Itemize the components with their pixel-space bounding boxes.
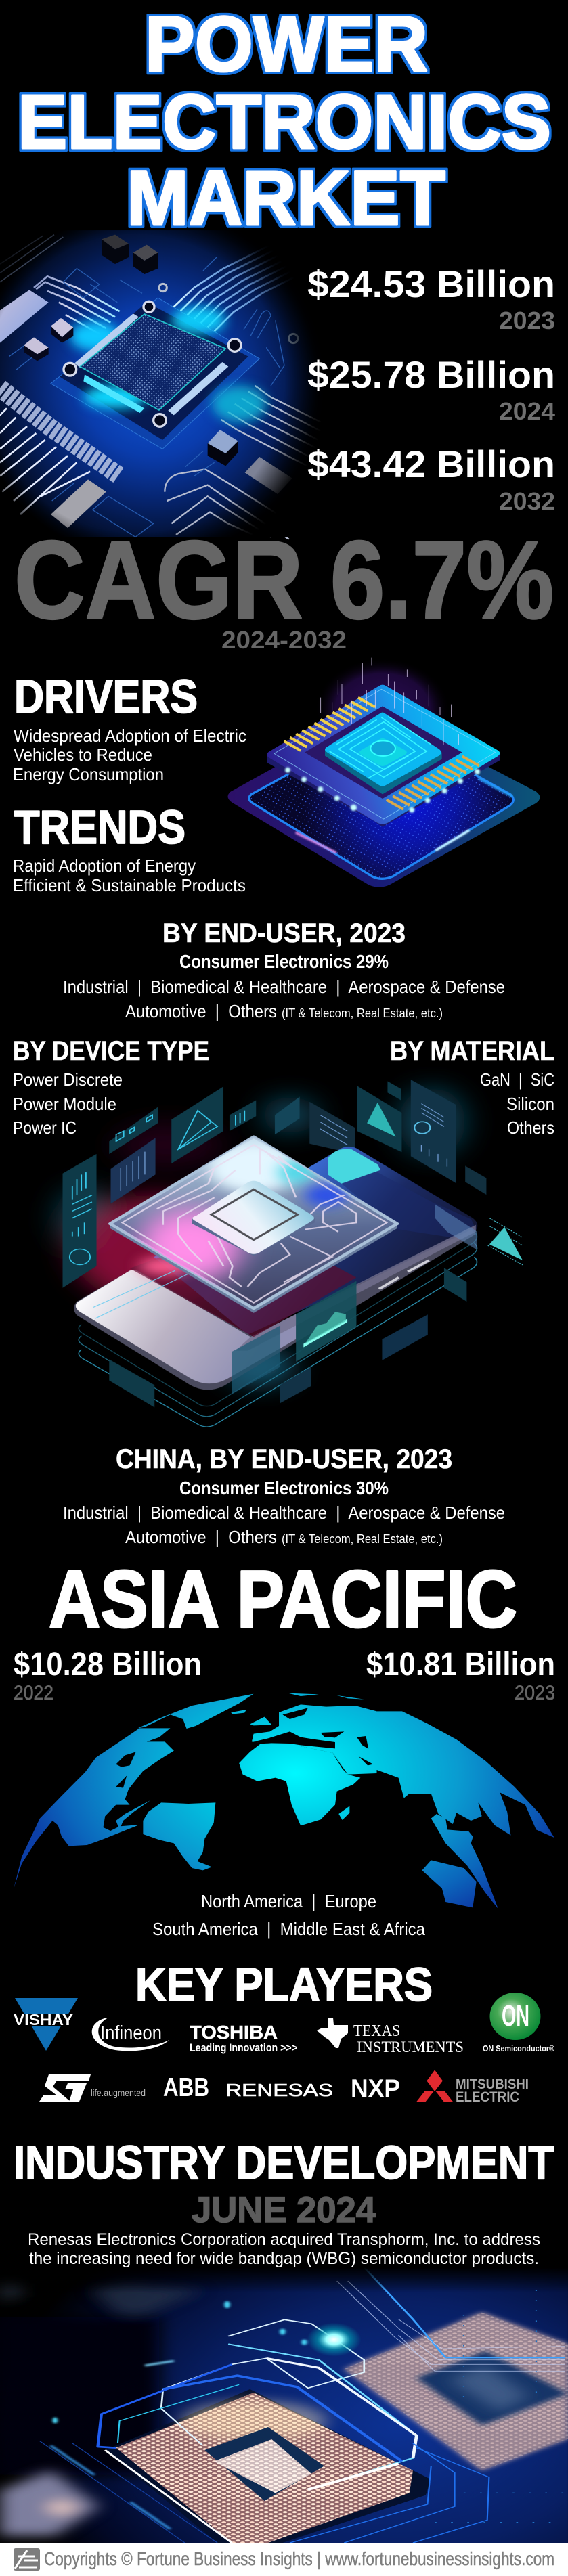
title: MARKET	[127, 155, 445, 242]
segment: China by end-user: Industrial | Biomedical & Healthcare | Aerospace & Defense	[63, 1503, 505, 1523]
other regions list: South America | Middle East & Africa	[152, 1919, 425, 1939]
Africa	[239, 1744, 360, 1825]
logo: Vishay	[12, 1998, 80, 2051]
second chip, out of focus	[344, 2313, 568, 2470]
drivers	[13, 670, 246, 784]
market values	[307, 263, 555, 515]
South America	[143, 1802, 215, 1870]
Asia Pacific values: 2022	[14, 1682, 53, 1704]
logo: Infineon	[92, 2018, 169, 2051]
logo: Mitsubishi Electric: MITSUBISHI	[456, 2077, 529, 2092]
heading: key players: KEY PLAYERS	[135, 1958, 433, 2011]
market values: $43.42 Billion	[307, 443, 555, 485]
development description	[28, 2230, 540, 2268]
segment: by material: BY MATERIAL	[390, 1036, 554, 1066]
drivers: Vehicles to Reduce	[14, 745, 152, 765]
segment: by material: Silicon	[506, 1094, 554, 1114]
trends: Efficient & Sustainable Products	[13, 875, 246, 895]
centre die	[192, 1218, 315, 1256]
triangle icon	[489, 1227, 523, 1260]
chip glow	[70, 307, 266, 422]
screws	[64, 301, 241, 426]
drivers: Widespread Adoption of Electric	[14, 726, 246, 746]
chip body	[267, 685, 500, 824]
Eurasia	[252, 1704, 554, 1838]
logo: STMicroelectronics	[39, 2074, 146, 2102]
market values: $25.78 Billion	[307, 353, 555, 396]
image: processor pins with glowing traces	[0, 2267, 568, 2543]
heading: Asia Pacific: ASIA PACIFIC	[49, 1554, 517, 1645]
segment: by device type: BY DEVICE TYPE	[13, 1036, 209, 1066]
inland seas	[116, 1708, 482, 1839]
Greenland	[137, 1694, 254, 1729]
segment: by material: GaN | SiC	[480, 1069, 554, 1090]
segment: China by end-user: Automotive | Others	[125, 1527, 277, 1547]
segment: by device type: Power Module	[13, 1094, 116, 1114]
segment: by end-user: Industrial | Biomedical & Healthcare | Aerospace & Defense	[63, 977, 505, 997]
other regions list	[152, 1891, 425, 1939]
device: glass back	[154, 1147, 477, 1335]
CAGR: 2024-2032	[221, 626, 347, 654]
development description: Renesas Electronics Corporation acquired Transphorm, Inc. to address	[28, 2230, 540, 2249]
logo: ABB: ABB	[163, 2073, 209, 2102]
logo: Toshiba	[190, 2022, 297, 2054]
logo: Texas Instruments: TEXAS	[353, 2022, 400, 2040]
trends: TRENDS	[14, 801, 185, 853]
title: POWER	[145, 0, 428, 88]
light streaks	[321, 658, 458, 745]
logo: Mitsubishi Electric	[416, 2070, 529, 2105]
North America	[14, 1728, 174, 1888]
segment: by end-user: Consumer Electronics 29%	[179, 951, 389, 972]
development description: the increasing need for wide bandgap (WBG) semiconductor products.	[29, 2249, 539, 2268]
segment: by end-user: Automotive | Others	[125, 1001, 277, 1021]
segment: by device type: Power Discrete	[13, 1069, 123, 1090]
logo: Toshiba: Leading Innovation >>>	[190, 2041, 297, 2054]
panels	[63, 1080, 486, 1407]
segment: by end-user	[63, 918, 505, 1021]
base plate	[228, 758, 540, 887]
segment: by device type: Power IC	[13, 1117, 77, 1138]
image: isometric chip with gold contacts	[228, 648, 540, 887]
other regions list: North America | Europe	[201, 1891, 376, 1911]
drivers: DRIVERS	[14, 670, 198, 723]
panel glows	[57, 1088, 465, 1385]
globe map	[14, 1693, 554, 1909]
image: circuit board with glowing processor	[0, 230, 332, 539]
trends: Rapid Adoption of Energy	[13, 856, 196, 876]
device: lower body	[74, 1229, 476, 1390]
cavity	[305, 706, 462, 799]
die	[80, 314, 225, 410]
logo: Toshiba: TOSHIBA	[190, 2022, 278, 2043]
chip thickness	[267, 753, 500, 827]
Australia	[422, 1860, 477, 1907]
logo: Texas Instruments	[317, 2018, 464, 2056]
segment: by device type	[13, 1036, 209, 1138]
market values: 2023	[499, 307, 555, 334]
logo: Vishay: VISHAY	[14, 2011, 73, 2028]
segment: by end-user: BY END-USER, 2023	[162, 918, 406, 948]
blurred background parts	[0, 2281, 203, 2536]
logo: Texas Instruments: INSTRUMENTS	[357, 2039, 464, 2056]
Caribbean	[116, 1800, 150, 1829]
components	[0, 290, 49, 343]
lens flares	[307, 2323, 361, 2357]
logo: ON Semiconductor: ON	[502, 1999, 529, 2033]
logo: Infineon: Infineon	[100, 2022, 162, 2044]
Asia Pacific values	[14, 1647, 555, 1704]
segment: by material	[390, 1036, 554, 1138]
footer bar	[0, 2543, 568, 2576]
centre die	[359, 738, 407, 766]
development date: JUNE 2024	[192, 2190, 376, 2230]
segment: by end-user: (IT & Telecom, Real Estate, etc.)	[282, 1006, 443, 1020]
chip base	[51, 298, 259, 449]
segment: by material: Others	[507, 1117, 554, 1138]
Asia Pacific values: 2023	[515, 1682, 555, 1704]
main chip	[105, 2389, 431, 2543]
board	[110, 1224, 397, 1313]
logo: Mitsubishi Electric: ELECTRIC	[456, 2089, 519, 2105]
market values: 2024	[499, 397, 555, 425]
market values: $24.53 Billion	[307, 263, 555, 305]
outlines	[79, 1232, 477, 1427]
segment: China by end-user: CHINA, BY END-USER, 2023	[116, 1444, 452, 1474]
segment: China by end-user: (IT & Telecom, Real Estate, etc.)	[282, 1532, 443, 1546]
Asia Pacific values: $10.28 Billion	[14, 1647, 202, 1683]
gold contacts	[284, 698, 375, 751]
LEDs	[285, 768, 480, 813]
logo: STMicroelectronics: life.augmented	[91, 2087, 146, 2098]
traces	[40, 2267, 565, 2543]
market values: 2032	[499, 487, 555, 515]
drivers: Energy Consumption	[13, 764, 164, 784]
segment: China by end-user	[63, 1444, 505, 1547]
title	[18, 0, 551, 242]
logo: Fortune Business Insights	[14, 2548, 40, 2571]
logo: NXP: NXP	[351, 2074, 400, 2102]
title: ELECTRONICS	[18, 79, 551, 164]
logo: ON Semiconductor	[483, 1993, 554, 2053]
Asia Pacific values: $10.81 Billion	[366, 1647, 555, 1683]
SE Asia and Indonesia	[431, 1814, 498, 1909]
segment: China by end-user: Consumer Electronics 30%	[179, 1478, 389, 1498]
logo: ON Semiconductor: ON Semiconductor®	[483, 2043, 554, 2053]
logo: Renesas: RENESAS	[225, 2080, 333, 2100]
image: isometric device with circuit board and floating data panels	[57, 1080, 523, 1427]
trends	[13, 801, 246, 895]
